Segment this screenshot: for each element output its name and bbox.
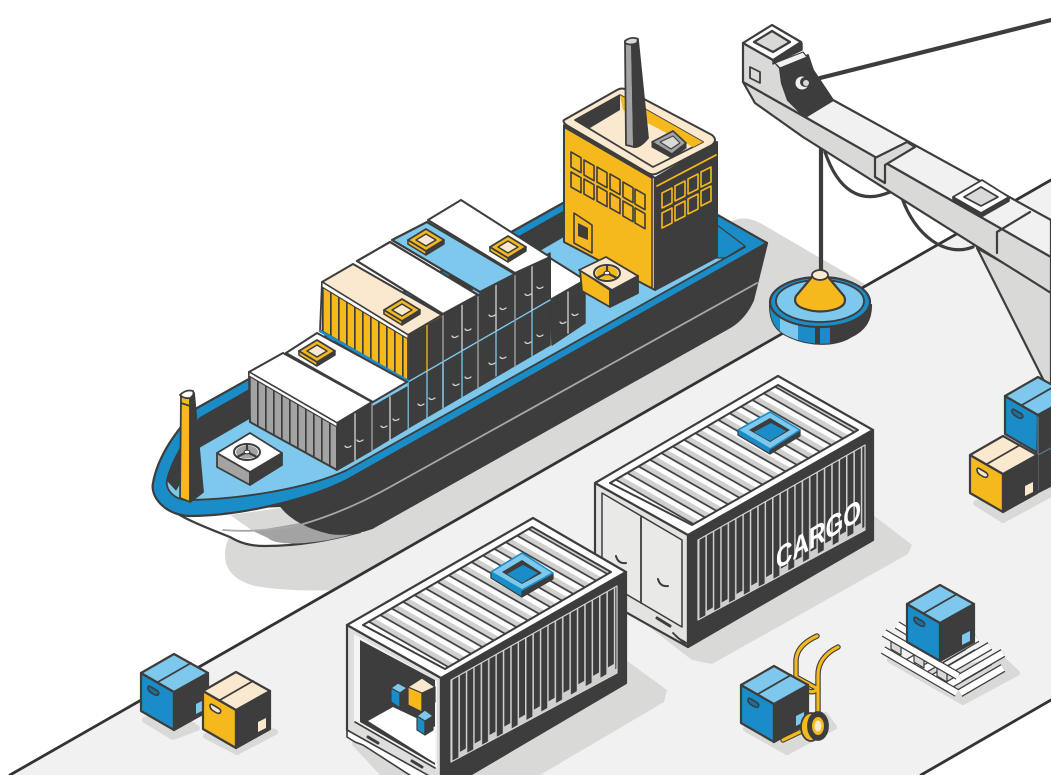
boxes right stack: [970, 377, 1051, 512]
door: [574, 213, 592, 253]
bow underside dark shading: [253, 523, 353, 543]
crane head body: [743, 43, 805, 117]
pallet upper planks: [884, 623, 1003, 678]
dock edge lines: [10, 180, 1051, 775]
back low container: [550, 258, 585, 345]
bow mast: [180, 390, 203, 502]
dark box: [1037, 407, 1051, 493]
foot: [673, 632, 703, 647]
ship shadow on water: [225, 218, 870, 590]
small blue box upper: [391, 683, 407, 708]
yellow box: [203, 672, 270, 748]
pallet blocks: [891, 639, 947, 682]
bow underside shading: [230, 508, 300, 531]
truck frame outline: [783, 636, 838, 740]
yellow box: [970, 436, 1037, 512]
roof: [595, 376, 873, 535]
box shadows: [145, 480, 1051, 752]
boom hatch: [953, 197, 1009, 217]
truck wheel: [801, 713, 821, 741]
crane boom: [743, 25, 1051, 293]
crane hoist cable: [819, 147, 823, 273]
white container top middle: [357, 242, 478, 314]
deck inner wall: [167, 212, 563, 490]
small blue box lower: [417, 710, 433, 735]
container hatches: [299, 229, 526, 366]
side wall: [688, 430, 873, 647]
small yellow box: [408, 678, 435, 712]
cargo lettering: CARGO: [776, 492, 861, 576]
pulley: [796, 76, 808, 90]
blue box: [1005, 377, 1051, 453]
magnet side: [770, 305, 871, 344]
hull stripe: [223, 283, 757, 531]
hand truck with blue box: [741, 636, 838, 742]
magnet top: [770, 277, 870, 327]
bridge right wall: [655, 142, 717, 290]
yellow container: [320, 264, 442, 381]
magnet cone: [795, 277, 845, 312]
boom top: [805, 100, 1051, 257]
boom joint: [875, 142, 915, 183]
roof hatch: [491, 572, 553, 597]
stern inner wall: [717, 225, 745, 258]
crane hoses: [825, 152, 973, 250]
white container top rear: [428, 200, 550, 273]
deck: [167, 170, 745, 500]
box on pallet: [907, 585, 974, 661]
blue base stripe: [320, 331, 408, 381]
sill: [347, 730, 433, 775]
boom underside: [743, 82, 1051, 293]
dock floor: [10, 180, 1051, 775]
roof: [347, 518, 626, 678]
stern ventilation box: [579, 257, 638, 307]
bow ventilation box: [217, 433, 282, 485]
stacked container door faces: [408, 253, 550, 428]
roof recess: [575, 95, 703, 167]
cargo ship: [153, 38, 767, 546]
roof hatch: [738, 430, 800, 454]
crane stay cable: [820, 20, 1051, 78]
truck box: [741, 666, 808, 742]
blue container top: [392, 222, 515, 292]
bridge left wall: [564, 125, 655, 290]
open end frame: [347, 625, 441, 775]
hull: [280, 243, 767, 534]
grey container front: [249, 353, 372, 470]
cargo container front open: [347, 518, 626, 775]
crane pulley housing: [780, 55, 833, 117]
interior: [360, 640, 435, 765]
boxes lower left: [141, 654, 270, 748]
bridge roof rim: [564, 88, 715, 174]
crane head hatch: [743, 25, 801, 60]
bridge building: [564, 38, 717, 290]
bow underside: [155, 495, 360, 546]
container shadows: [352, 515, 912, 775]
side wall: [441, 572, 626, 775]
white container on bow side: [286, 333, 407, 450]
blue box: [141, 654, 208, 730]
funnel: [625, 42, 634, 147]
right windows: [662, 167, 711, 228]
door face: [595, 483, 688, 647]
magnet hook: [770, 270, 871, 350]
truck frame: [783, 636, 838, 740]
left windows: [571, 152, 645, 229]
roof hatch: [652, 142, 686, 158]
cargo container rear: [595, 376, 873, 647]
crane strut: [977, 248, 1051, 395]
deck rim: [153, 165, 767, 516]
interior floor: [368, 707, 435, 763]
